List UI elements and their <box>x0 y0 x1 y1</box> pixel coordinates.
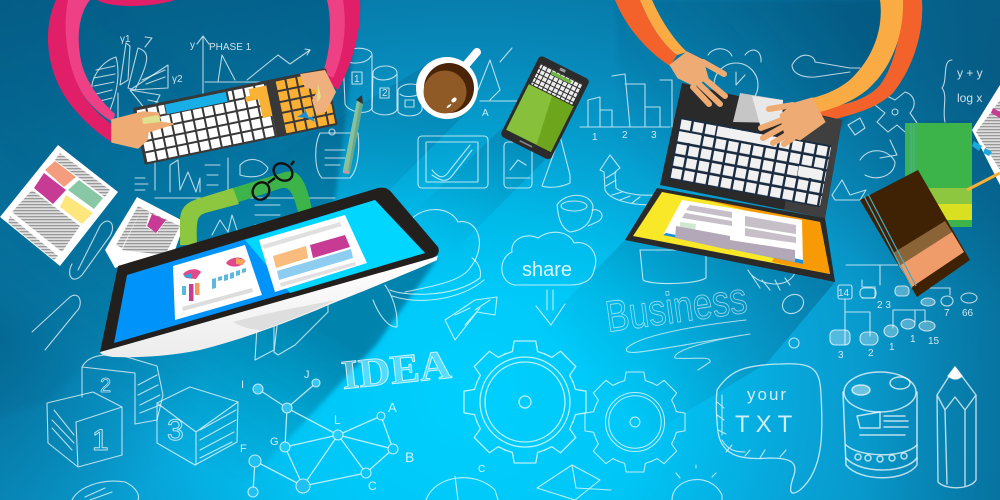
sketch: pie chart and line chart: y <box>190 40 195 51</box>
hand on laptop left <box>670 52 725 104</box>
paper top right <box>972 85 1000 185</box>
sketch: pie chart and line chart <box>92 34 310 120</box>
green pencil <box>343 95 363 174</box>
speech bubble: your TXT: your <box>747 385 788 404</box>
sketch: tree diagram with numbers: 2 3 <box>877 300 891 311</box>
orange arm right <box>812 0 922 122</box>
Business lettering: Business <box>603 274 750 342</box>
sketch: pie chart and line chart: PHASE 1 <box>209 42 252 53</box>
sketch: arrows <box>445 297 497 340</box>
sketch: tree diagram with numbers: 1 <box>910 334 916 345</box>
sketch: tree diagram with numbers: 14 <box>838 288 850 299</box>
sketch: network diagram: B <box>405 449 414 465</box>
sketch: tree diagram with numbers: 2 <box>868 348 874 359</box>
sketch: arrow up <box>600 155 652 205</box>
sketch: line chart A: A <box>482 108 489 119</box>
sketch: coffee mug <box>557 195 602 232</box>
sketch: tree diagram with numbers <box>830 265 977 361</box>
speech bubble: your TXT <box>716 364 822 493</box>
sketch: tree diagram with numbers: 15 <box>928 336 940 347</box>
sketch: tablet with check mark <box>418 136 488 188</box>
sketch: pencil <box>937 367 976 488</box>
sketch: box, lightbulb and pie at bottom <box>426 464 722 500</box>
sketch: bar chart: 3 <box>651 130 657 141</box>
brown notebook <box>860 170 970 297</box>
sketch: line chart A <box>478 48 520 119</box>
sketch: cylinders: 1 <box>354 74 360 85</box>
glasses <box>249 160 296 203</box>
sketch: tree diagram with numbers: 1 <box>889 342 895 353</box>
sketch: network diagram: C <box>368 479 377 493</box>
orange pencil <box>967 173 1000 190</box>
sketch: pie chart and line chart: γ2 <box>172 74 183 85</box>
paper sheet left <box>0 145 118 266</box>
share cloud: share <box>522 259 572 281</box>
pink arm <box>48 0 360 143</box>
sketch: paperclips <box>32 221 113 350</box>
sketch: formulas: y + y <box>957 66 983 80</box>
sketch: ribbons and tape <box>255 258 484 360</box>
sketch: cubes <box>47 355 238 500</box>
sketch: notepad and finance charts <box>135 129 359 235</box>
gears <box>464 341 685 472</box>
sketch: cubes: 3 <box>167 414 184 447</box>
green smartphone <box>500 55 590 161</box>
right hand on keyboard <box>300 70 336 114</box>
left hand <box>112 112 173 148</box>
sketch: box, lightbulb and pie at bottom: C <box>478 464 485 475</box>
sketch: box of share and hat <box>640 250 807 348</box>
heading: IDEA: IDEA <box>339 341 454 398</box>
sketch: cylinders: 2 <box>382 88 388 99</box>
sketch: puzzle and gear icons <box>832 92 917 200</box>
green notebook <box>905 123 972 227</box>
sketch: tree diagram with numbers: 66 <box>962 308 974 319</box>
hand on laptop right <box>761 98 825 144</box>
orange arm left <box>615 0 687 66</box>
sketch: formulas: log x <box>957 91 982 105</box>
sketch: network diagram: J <box>304 369 310 381</box>
sketch: network diagram: G <box>270 436 279 448</box>
sketch: network diagram: L <box>334 413 341 427</box>
sketch: network diagram: F <box>240 443 247 455</box>
sketch: cloud and alarm clock <box>405 49 860 292</box>
tablet computer <box>100 188 439 357</box>
sketch: network diagram: A <box>388 400 397 415</box>
laptop screen <box>625 188 835 282</box>
thumbtack <box>297 105 318 122</box>
sketch: mobile phones <box>504 136 570 188</box>
tablet page one <box>173 245 262 320</box>
sketch: tree diagram with numbers: 7 <box>944 308 950 319</box>
sketch: bar chart <box>580 74 672 143</box>
speech bubble: your TXT: TXT <box>735 411 798 438</box>
sketch: pie chart and line chart: γ1 <box>120 34 131 45</box>
sketch: network diagram: I <box>241 379 244 391</box>
tablet page two <box>259 215 367 292</box>
tablet stand <box>180 171 312 245</box>
sketch: bar chart: 2 <box>622 130 628 141</box>
sketch: cylinders <box>343 48 422 116</box>
paper sheet second <box>105 197 185 268</box>
Business lettering <box>603 274 750 370</box>
sketch: bar chart: 1 <box>592 132 598 143</box>
sketch: tree diagram with numbers: 3 <box>838 350 844 361</box>
coffee cup <box>416 52 478 119</box>
sketch: network diagram <box>240 369 414 497</box>
sketch: cubes: 1 <box>92 424 109 457</box>
sketch: formulas <box>942 60 983 122</box>
sketch: cubes: 2 <box>100 375 111 397</box>
sketch: tin can <box>843 372 917 478</box>
laptop <box>660 83 842 218</box>
dark keyboard <box>133 68 338 165</box>
share cloud <box>502 232 596 325</box>
